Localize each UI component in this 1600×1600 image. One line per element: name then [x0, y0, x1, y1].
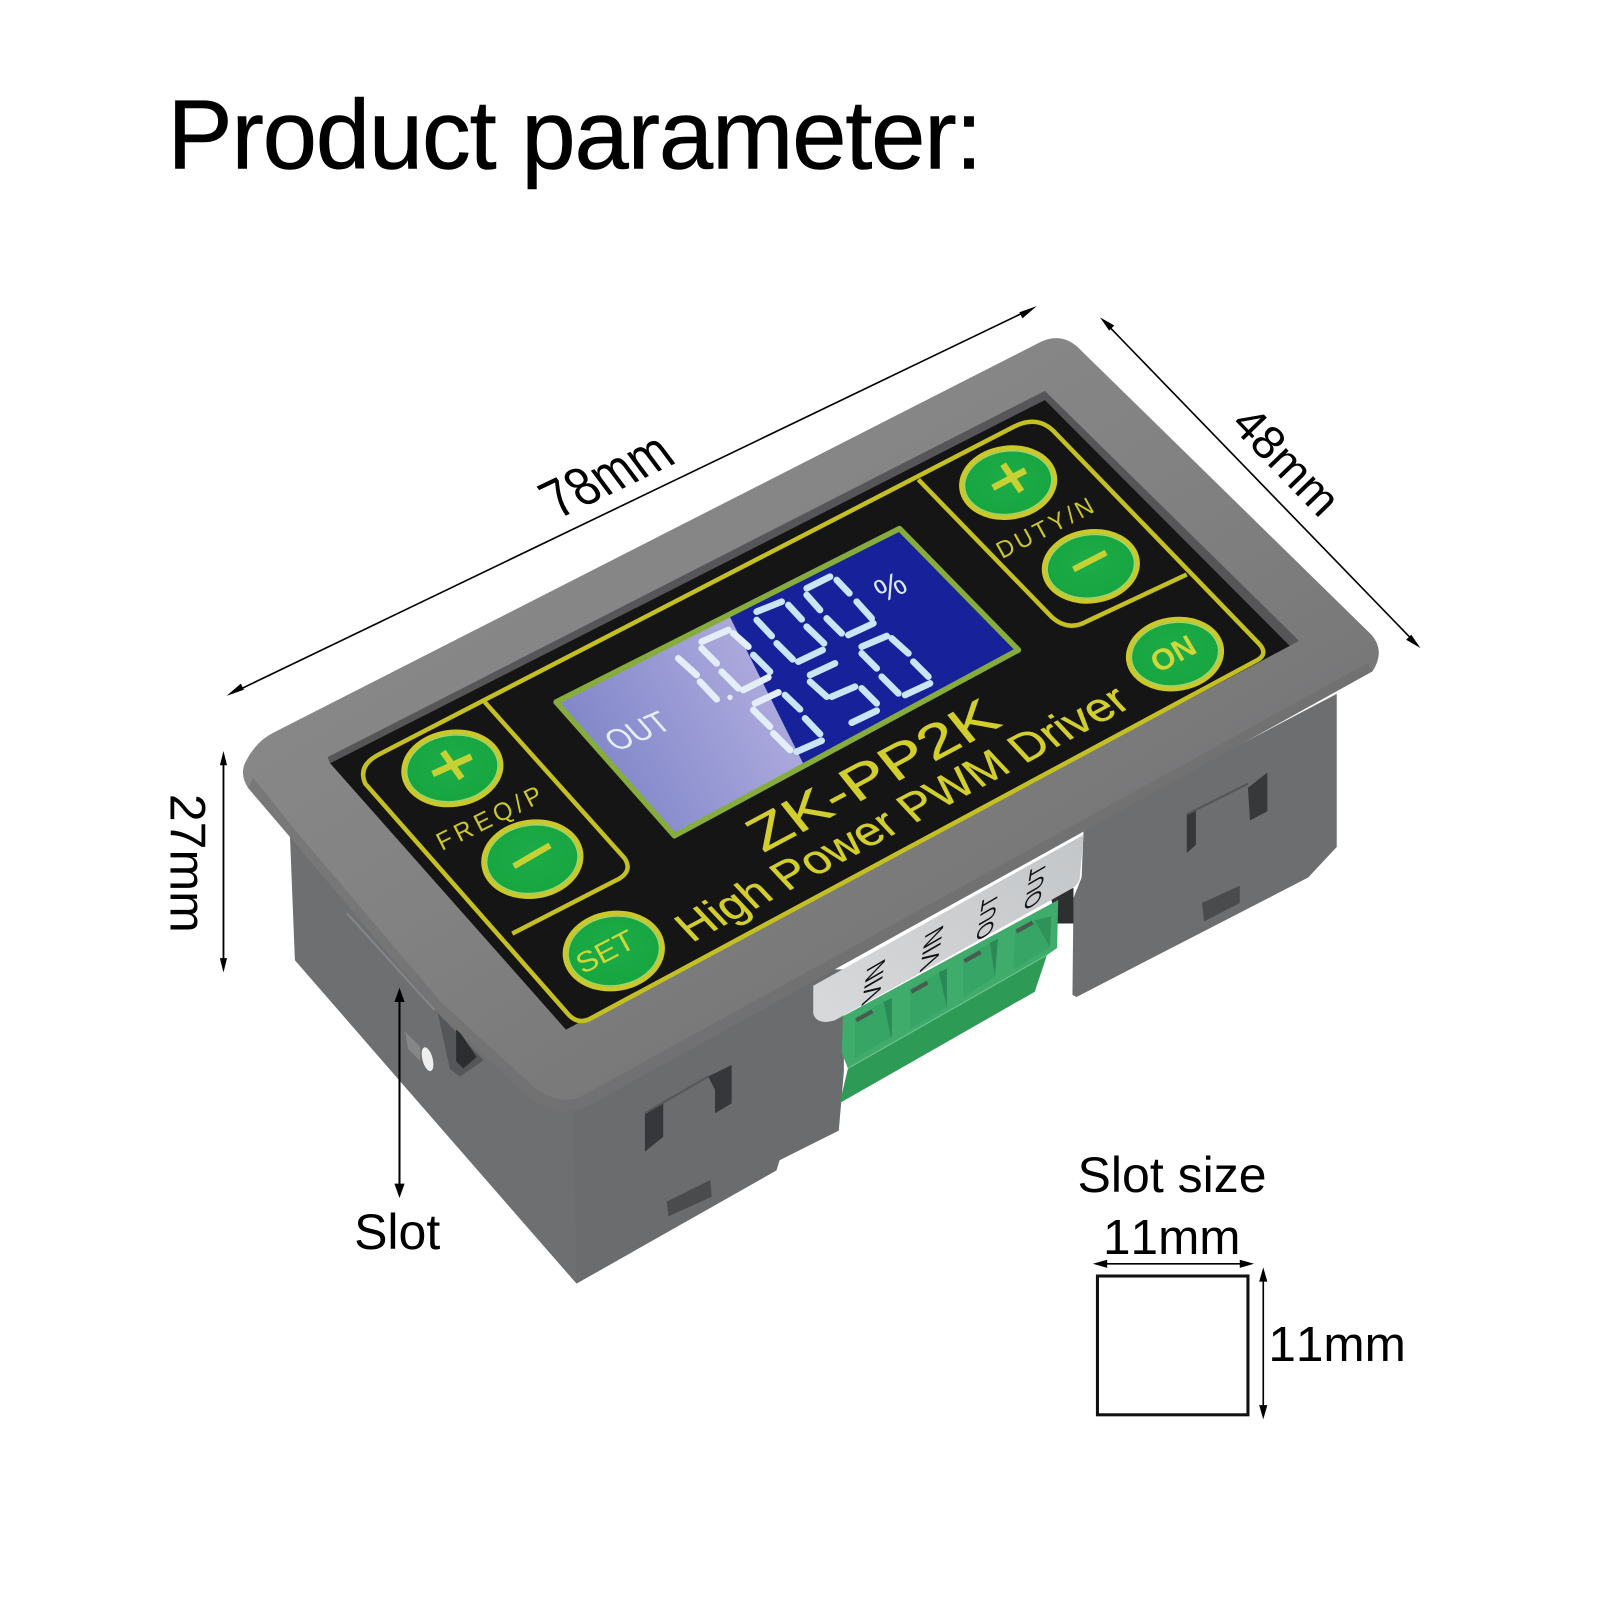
device left side body [290, 832, 580, 1284]
dimension: height arrow 27mm [159, 751, 227, 972]
slot height arrow [1259, 1267, 1267, 1419]
button: DUTY minus [1040, 525, 1142, 607]
dimension: depth arrow 48mm: 48mm [1222, 396, 1350, 526]
button: SET: SET [571, 925, 641, 980]
yellow panel outlines [363, 422, 1263, 1021]
inner recess bevel [328, 391, 1299, 763]
dimension: height arrow 27mm: 27mm [159, 794, 215, 933]
device front-left block [573, 969, 844, 1284]
button: ON: ON [1145, 630, 1202, 679]
LCD percent sign: % [868, 566, 914, 610]
button: ON [1124, 613, 1226, 695]
dimension: width arrow 78mm [227, 306, 1037, 696]
button: SET [560, 907, 668, 995]
slot arrow and label: Slot [354, 1204, 440, 1260]
slot width label: 11mm [1103, 1210, 1241, 1265]
title: Product parameter: [167, 79, 983, 189]
LCD OUT label: OUT [596, 705, 679, 758]
terminal label strip: OUT [1020, 857, 1052, 914]
LCD segment digits [678, 577, 930, 752]
terminal label strip: OUT [972, 888, 1004, 945]
terminal label strip: VIN [914, 920, 949, 976]
LCD display [556, 529, 1018, 836]
label: DUTY/N: DUTY/N [992, 491, 1102, 565]
subtitle High Power PWM Driver: High Power PWM Driver [664, 676, 1140, 950]
button: DUTY plus [957, 442, 1059, 524]
device front-right block [1072, 694, 1337, 997]
button: FREQ minus [479, 815, 586, 903]
slot size heading: Slot size [1078, 1147, 1267, 1203]
slot height label: 11mm [1268, 1317, 1406, 1372]
grey front bezel [243, 338, 1379, 1111]
dimension: depth arrow 48mm [1100, 317, 1420, 648]
slot width arrow [1093, 1260, 1254, 1268]
slot arrow and label [354, 988, 440, 1260]
slot square [1097, 1276, 1248, 1415]
dimension: width arrow 78mm: 78mm [527, 421, 686, 530]
device: PWM driver module [243, 338, 1379, 1284]
model name ZK-PP2K: ZK-PP2K [735, 689, 1011, 862]
button: FREQ plus [399, 726, 506, 811]
slot size diagram [1078, 1147, 1406, 1419]
terminal block connector [840, 888, 1073, 1103]
black control panel [330, 400, 1290, 1030]
terminal label strip: VIN [855, 954, 891, 1010]
label: FREQ/P: FREQ/P [432, 779, 551, 856]
terminal label strip [813, 835, 1084, 1022]
